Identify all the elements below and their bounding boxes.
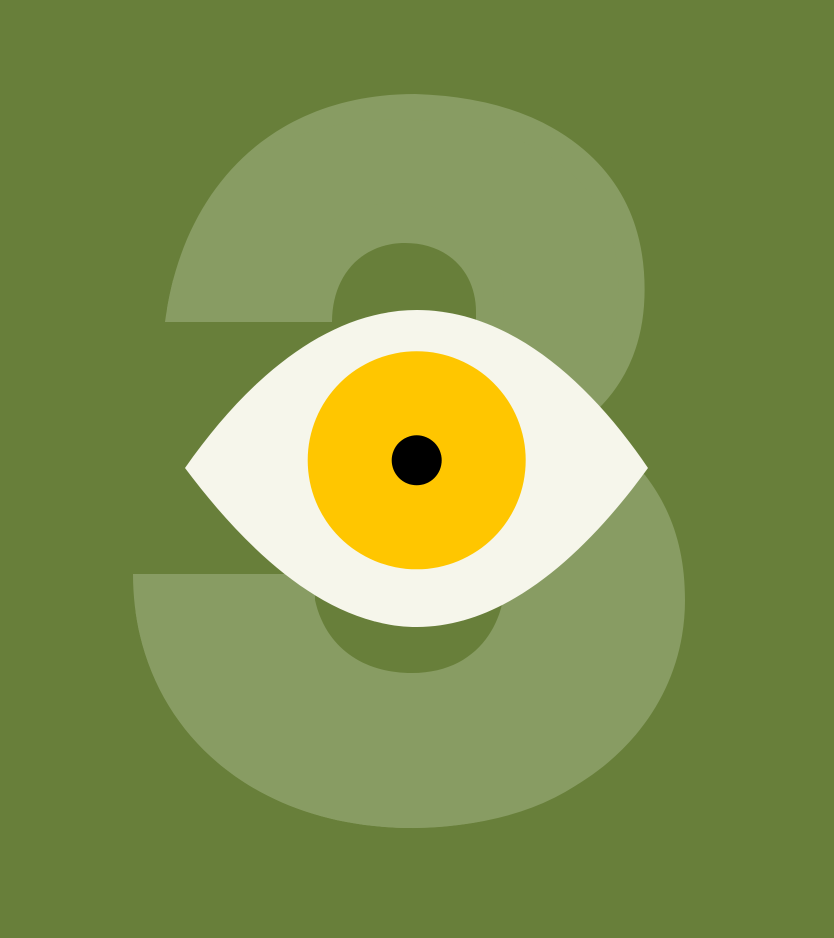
eye white [185,310,648,627]
iris [308,351,526,569]
icon: eye [185,310,648,627]
pupil [392,435,442,485]
